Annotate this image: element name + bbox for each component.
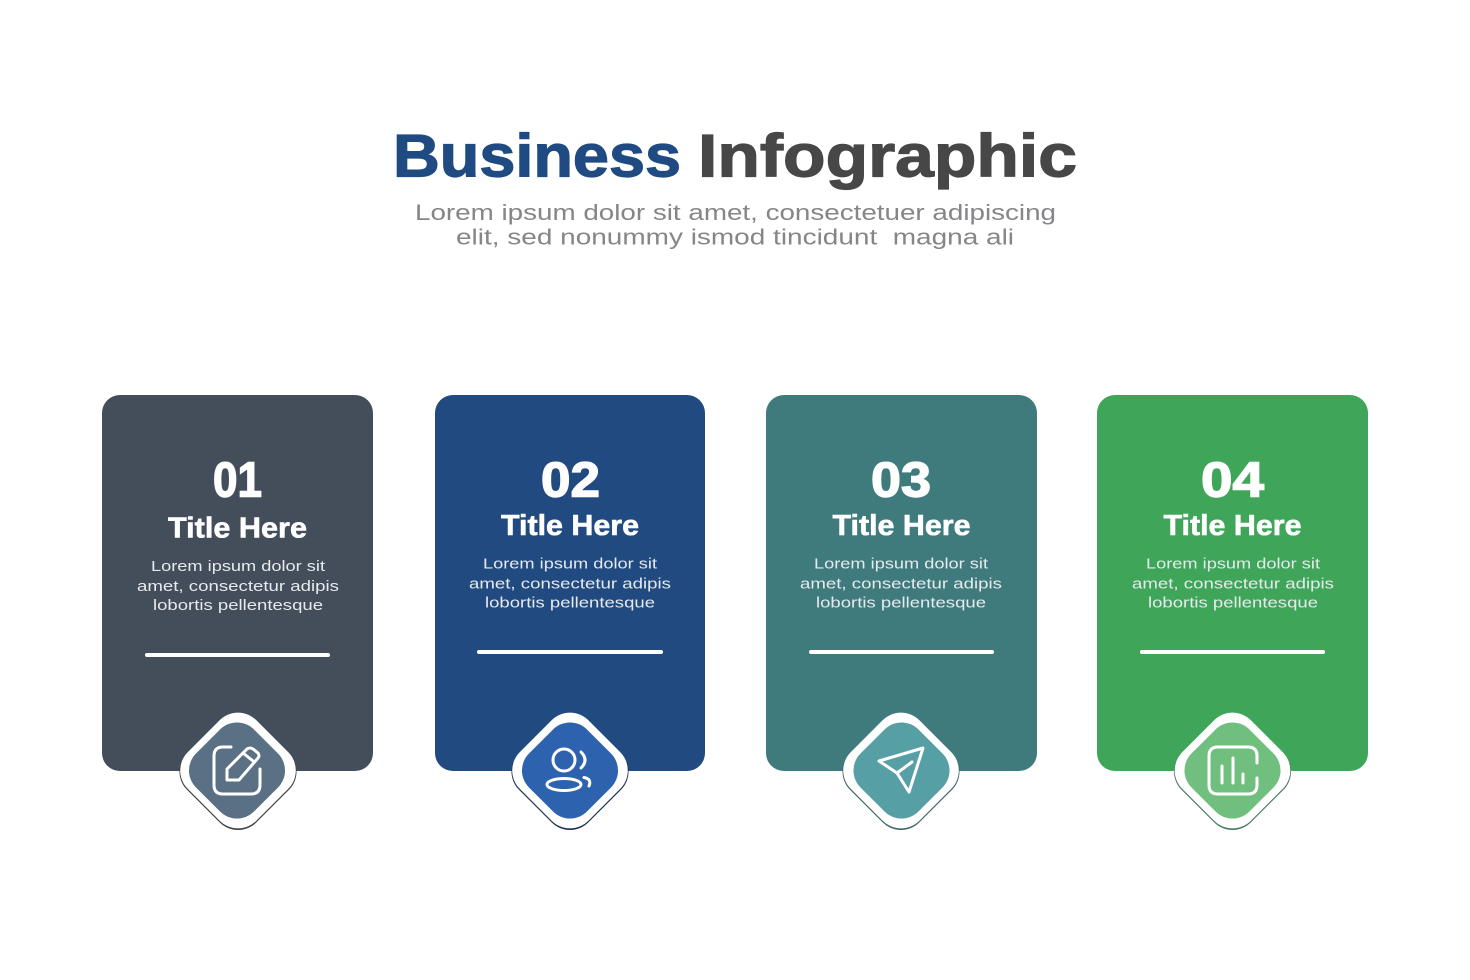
icon badge: users bbox=[501, 702, 639, 841]
body text: Lorem ipsum dolor sit bbox=[151, 558, 326, 575]
body text: amet, consectetur adipis bbox=[469, 576, 671, 592]
subtitle: Lorem ipsum dolor sit amet, consectetuer adipiscing bbox=[415, 200, 1056, 225]
card background bbox=[435, 395, 705, 771]
panel: card 01 bbox=[102, 395, 373, 841]
body text bbox=[800, 556, 1002, 612]
card background bbox=[766, 395, 1037, 771]
subtitle bbox=[415, 200, 1056, 250]
body text: amet, consectetur adipis bbox=[137, 578, 339, 595]
panel: card 02 bbox=[435, 395, 705, 841]
number 02: 02 bbox=[541, 454, 600, 508]
body text: lobortis pellentesque bbox=[485, 594, 655, 612]
panel: card 03 bbox=[766, 395, 1037, 841]
card title: Title Here bbox=[832, 510, 970, 542]
body text: amet, consectetur adipis bbox=[800, 576, 1002, 592]
subtitle: elit, sed nonummy ismod tincidunt magna ali bbox=[456, 224, 1014, 250]
card title: Title Here bbox=[501, 510, 639, 542]
body text: Lorem ipsum dolor sit bbox=[814, 556, 989, 572]
number 03: 03 bbox=[871, 454, 931, 508]
body text: Lorem ipsum dolor sit bbox=[483, 556, 658, 572]
panel: card 04 bbox=[1097, 395, 1368, 841]
body text: amet, consectetur adipis bbox=[1132, 576, 1334, 592]
body text: Lorem ipsum dolor sit bbox=[1146, 556, 1321, 572]
header bbox=[393, 122, 1077, 250]
title: Business bbox=[393, 122, 681, 190]
title bbox=[393, 122, 1077, 190]
body text: lobortis pellentesque bbox=[816, 594, 986, 612]
body text bbox=[1132, 556, 1334, 612]
title: Infographic bbox=[698, 122, 1077, 190]
number 04: 04 bbox=[1201, 454, 1264, 508]
card title: Title Here bbox=[1164, 510, 1302, 542]
card title: Title Here bbox=[168, 512, 307, 544]
icon badge: paper plane bbox=[832, 702, 970, 841]
body text bbox=[137, 558, 339, 614]
body text bbox=[469, 556, 671, 612]
card background bbox=[1097, 395, 1368, 771]
icon badge: bar chart bbox=[1163, 702, 1302, 841]
body text: lobortis pellentesque bbox=[1148, 594, 1318, 612]
number 01: 01 bbox=[213, 454, 262, 508]
body text: lobortis pellentesque bbox=[153, 597, 323, 614]
card background bbox=[102, 395, 373, 771]
icon badge: pencil bbox=[169, 702, 307, 841]
